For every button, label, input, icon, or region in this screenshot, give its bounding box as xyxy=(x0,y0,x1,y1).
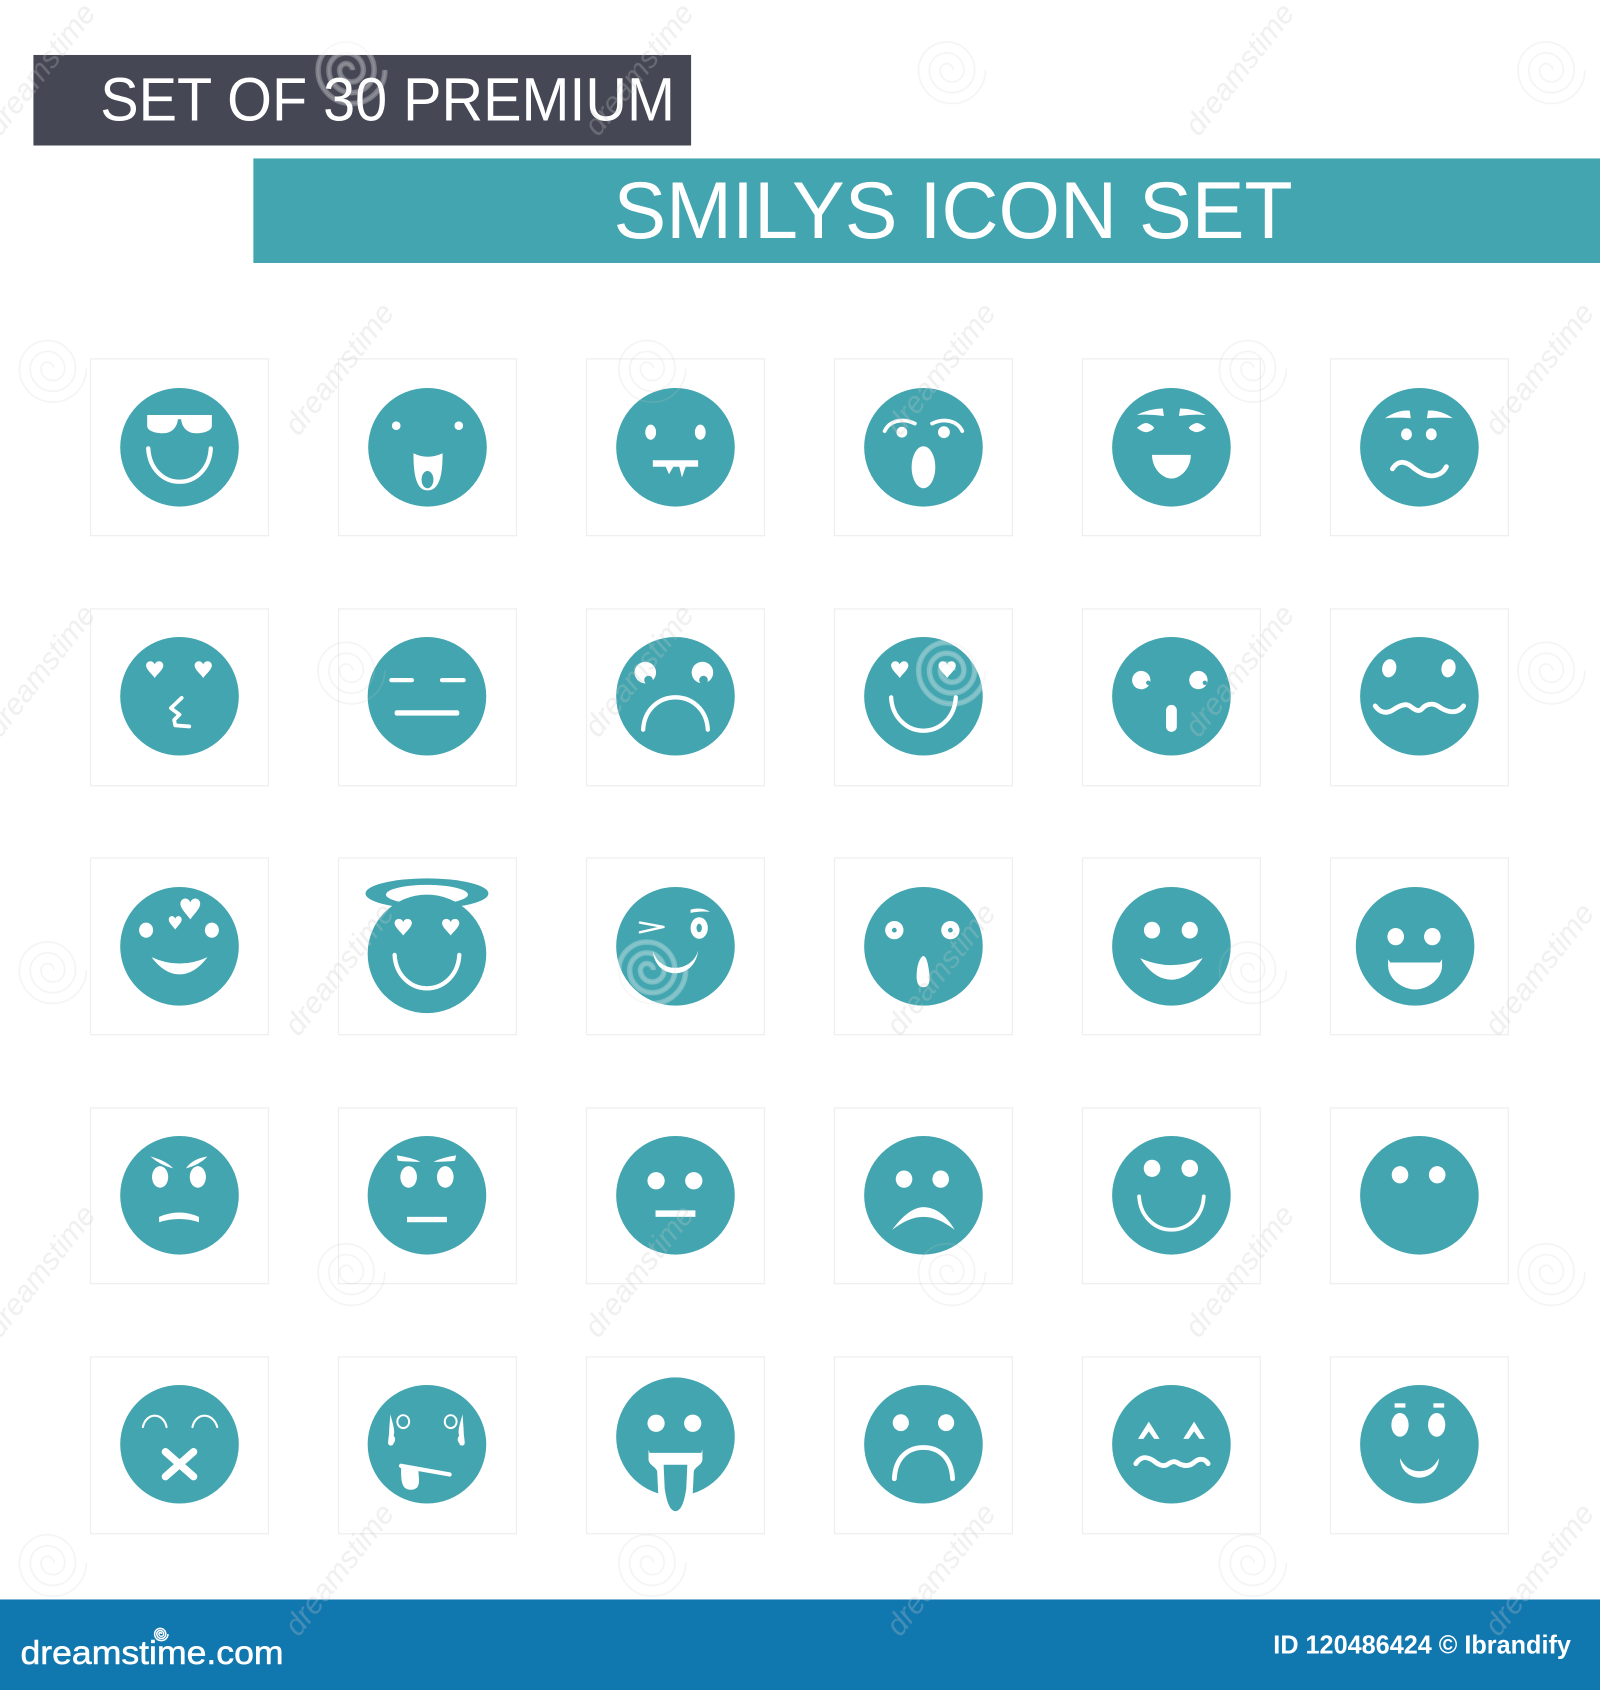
icon tile: sad crescent smiley xyxy=(835,1108,1012,1284)
icon tile: grinning open mouth smiley xyxy=(1330,858,1508,1035)
face: surprised xyxy=(864,388,983,507)
footer bar xyxy=(0,1599,1600,1690)
icon tile: worried wavy mouth smiley xyxy=(1330,359,1508,536)
text: dreamstime xyxy=(880,897,1003,1042)
face: wink xyxy=(616,887,735,1006)
icon tile: long tongue smiley xyxy=(587,1357,764,1534)
text: dreamstime xyxy=(278,297,401,441)
text: dreamstime xyxy=(880,1498,1003,1642)
face: classic smile xyxy=(1112,1136,1231,1255)
text: dreamstime xyxy=(1178,1199,1301,1344)
icon tile: crying tongue out smiley xyxy=(339,1357,516,1534)
title banner: smilys icon set: SMILYS ICON SET xyxy=(613,166,1293,256)
icon tile: stunned ring eyes smiley xyxy=(835,858,1012,1035)
icon tile: frowning smiley xyxy=(835,1357,1012,1534)
face: queasy xyxy=(1360,637,1479,756)
face: fangs xyxy=(616,388,735,507)
top banner: set of 30 premium xyxy=(33,55,691,146)
icon tile: big frown smiley xyxy=(587,609,764,786)
text: dreamstime xyxy=(1478,297,1600,441)
halo xyxy=(365,878,488,909)
text: dreamstime xyxy=(578,1199,701,1344)
text: dreamstime xyxy=(1178,599,1301,743)
text: dreamstime xyxy=(278,1498,401,1642)
icon tile: nervous caret eyes smiley xyxy=(1082,1357,1260,1534)
face: frowning xyxy=(864,1385,983,1504)
footer bar: dreamstime.com xyxy=(20,1635,284,1672)
icon tile: classic smile smiley xyxy=(1082,1108,1260,1284)
face: worried xyxy=(1360,388,1479,507)
icon tile: laughing eyebrows smiley xyxy=(1082,359,1260,536)
face: angel xyxy=(368,895,486,1013)
icon tile: expressionless smiley xyxy=(339,609,516,786)
face: sunglasses xyxy=(120,388,239,507)
text: dreamstime xyxy=(578,599,701,743)
icon tile: kissing heart eyes smiley xyxy=(91,609,268,786)
face: long tongue xyxy=(616,1377,735,1513)
title banner: smilys icon set xyxy=(253,158,1600,263)
text: dreamstime xyxy=(1478,1498,1600,1642)
icon tile: muted x mouth smiley xyxy=(91,1357,268,1534)
icon tile: shocked side eyes smiley xyxy=(1082,609,1260,786)
icon tile: angel halo smiley xyxy=(339,858,516,1035)
top banner: set of 30 premium: SET OF 30 PREMIUM xyxy=(100,66,675,135)
face: grinning xyxy=(1356,887,1474,1006)
face: sad xyxy=(864,1136,983,1255)
face: heart eyes xyxy=(864,637,983,756)
face: hearts forehead xyxy=(120,887,239,1006)
text: dreamstime xyxy=(278,897,401,1042)
icon tile: stern flat mouth smiley xyxy=(339,1108,516,1284)
face: nervous xyxy=(1112,1385,1231,1504)
icon tile: happy crescent smile smiley xyxy=(1082,858,1260,1035)
icon tile: heart eyes smile smiley xyxy=(835,609,1012,786)
footer bar: ID 120486424 © Ibrandify xyxy=(1273,1631,1571,1659)
icon tile: sunglasses smiley xyxy=(91,359,268,536)
face: stern xyxy=(368,1136,486,1255)
face: stunned xyxy=(864,887,983,1006)
face: expressionless xyxy=(368,637,486,756)
icon tile: neutral smiley xyxy=(587,1108,764,1284)
text: dreamstime xyxy=(880,297,1003,441)
face: shocked xyxy=(1112,637,1231,756)
text: dreamstime xyxy=(578,0,701,142)
icon tile: hearts on forehead smiley xyxy=(91,858,268,1035)
face: no mouth xyxy=(1360,1136,1479,1255)
icon tile: surprised raised eyebrows smiley xyxy=(835,359,1012,536)
face: small smile xyxy=(1360,1385,1479,1504)
face: open mouth xyxy=(368,388,487,507)
face: neutral xyxy=(616,1136,735,1255)
face: laughing xyxy=(1112,388,1231,507)
icon tile: open mouth small eyes smiley xyxy=(339,359,516,536)
face: crying tongue xyxy=(368,1385,486,1504)
face: kiss xyxy=(120,637,239,756)
icon tile: angry frown smiley xyxy=(91,1108,268,1284)
face: muted xyxy=(120,1385,239,1504)
icon tile: queasy wavy mouth smiley xyxy=(1330,609,1508,786)
icon tile: small eyebrows smile smiley xyxy=(1330,1357,1508,1534)
icon tile: no mouth smiley xyxy=(1330,1108,1508,1284)
face: happy xyxy=(1112,887,1231,1006)
text: dreamstime xyxy=(1478,897,1600,1042)
icon tile: vampire fangs smiley xyxy=(587,359,764,536)
icon tile: winking smiley xyxy=(587,858,764,1035)
text: dreamstime xyxy=(1178,0,1301,142)
face: big frown xyxy=(616,637,735,756)
face: angry xyxy=(120,1136,239,1255)
